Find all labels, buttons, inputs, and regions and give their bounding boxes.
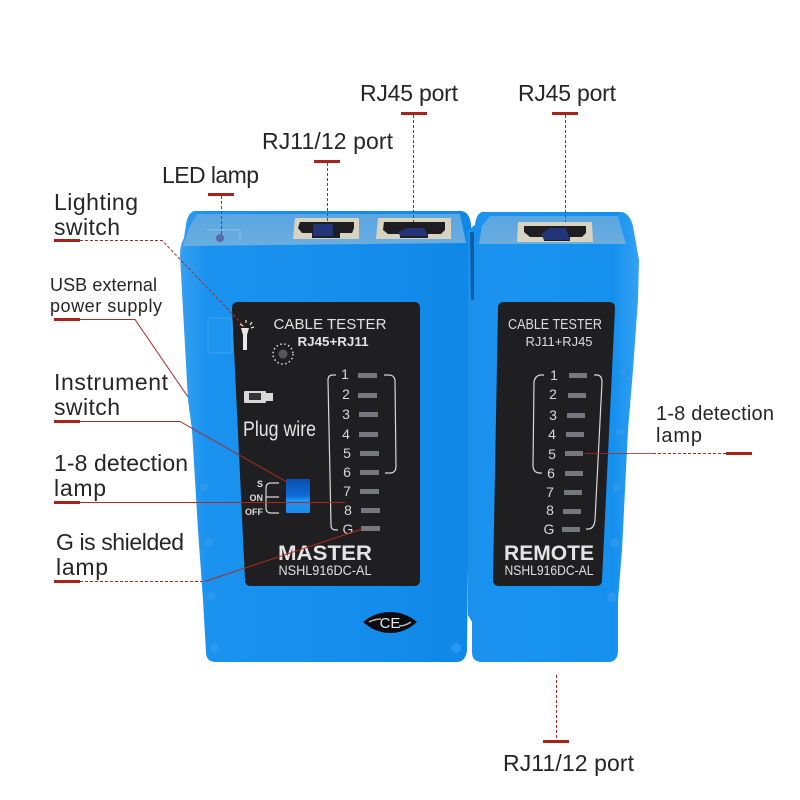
- panel title: CABLE TESTER: [508, 316, 602, 333]
- master model: NSHL916DC-AL: [278, 562, 372, 578]
- remote model: NSHL916DC-AL: [504, 562, 594, 578]
- label: RJ11/12 port bottom: RJ11/12 port: [503, 750, 635, 776]
- master lamp numbers: 2: [342, 386, 350, 402]
- switch labels: S: [257, 479, 263, 489]
- remote lamp numbers: 7: [546, 484, 554, 500]
- master brackets: [328, 375, 396, 530]
- master lamp numbers: 4: [342, 426, 350, 442]
- label: LED lamp: [162, 162, 259, 236]
- label: instrument switch: [54, 369, 287, 482]
- label: lighting switch: switch: [54, 214, 120, 240]
- RJ11 port on master: [293, 218, 359, 239]
- label: RJ45 port remote: [518, 80, 617, 222]
- label: instrument switch: Instrument: [54, 369, 169, 395]
- label: G is shielded lamp: G is shielded: [56, 529, 184, 555]
- icon: indicator lamp: [273, 344, 293, 364]
- remote lamp numbers: 5: [548, 446, 556, 462]
- icon: flashlight: [240, 320, 254, 350]
- panel subtitle: RJ45+RJ11: [298, 334, 368, 349]
- master top face: [183, 214, 466, 246]
- label: RJ45 port master: RJ45 port: [360, 80, 459, 106]
- plug wire text: Plug wire: [243, 418, 316, 441]
- label: RJ45 port master: [360, 80, 459, 222]
- remote lamps: [562, 373, 587, 532]
- CE badge: [363, 612, 417, 633]
- master lamp numbers: 1: [341, 366, 349, 382]
- master name: MASTER: [278, 542, 372, 565]
- master body: [180, 211, 471, 662]
- remote lamp numbers: 6: [547, 465, 555, 481]
- RJ45 port on master: [376, 218, 451, 239]
- remote brackets: [533, 375, 602, 529]
- master panel: [232, 302, 420, 586]
- switch bracket: [266, 483, 279, 513]
- led lamp: [207, 230, 240, 242]
- label: LED lamp: LED lamp: [162, 162, 259, 188]
- label: RJ11/12 port top: RJ11/12 port: [262, 128, 394, 154]
- switch labels: ON: [250, 493, 263, 503]
- switch labels: OFF: [245, 507, 263, 517]
- gap shadow between devices: [470, 232, 474, 300]
- device: remote tester: [468, 212, 639, 662]
- panel title: CABLE TESTER: [274, 316, 387, 333]
- remote name: REMOTE: [504, 542, 594, 565]
- master side bumps: [199, 482, 461, 653]
- remote lamp numbers: 3: [549, 407, 557, 423]
- label: USB external power supply: USB external: [50, 275, 157, 295]
- remote lamp numbers: 1: [550, 367, 558, 383]
- device: master tester: [180, 211, 471, 662]
- master lamp numbers: 3: [342, 406, 350, 422]
- remote body: [468, 212, 639, 662]
- remote lamp numbers: [544, 367, 558, 537]
- label: USB external power supply: power supply: [50, 296, 162, 316]
- label: USB external power supply: [50, 275, 188, 397]
- master lamp numbers: [341, 366, 353, 537]
- label: lighting switch: Lighting: [54, 189, 138, 215]
- label: instrument switch: switch: [54, 394, 120, 420]
- label: 1-8 detection lamp right: 1-8 detection: [656, 403, 774, 425]
- label: 1-8 detection lamp left: 1-8 detection: [54, 450, 188, 476]
- label: 1-8 detection lamp right: [585, 403, 774, 455]
- remote lamp numbers: G: [544, 521, 554, 537]
- switch labels: [245, 479, 263, 517]
- remote lamp numbers: 2: [549, 386, 557, 402]
- label: RJ11/12 port top: [262, 128, 394, 222]
- label: G is shielded lamp: [54, 529, 362, 583]
- panel subtitle: RJ11+RJ45: [526, 334, 592, 349]
- side tab: [208, 318, 232, 353]
- master lamp numbers: 7: [343, 483, 351, 499]
- label: 1-8 detection lamp left: lamp: [54, 475, 106, 501]
- label: G is shielded lamp: lamp: [56, 554, 108, 580]
- master lamps: [358, 373, 380, 531]
- label: RJ11/12 port bottom: [503, 675, 635, 776]
- label: RJ45 port remote: RJ45 port: [518, 80, 617, 106]
- icon: usb plug: [244, 391, 273, 403]
- label: 1-8 detection lamp left: [54, 450, 345, 504]
- RJ45 port on remote: [517, 222, 593, 242]
- remote panel: [493, 302, 615, 586]
- master lamp numbers: 5: [343, 445, 351, 461]
- master lamp numbers: 6: [343, 464, 351, 480]
- remote side bumps: [607, 367, 629, 602]
- label: 1-8 detection lamp right: lamp: [656, 425, 702, 447]
- master lamp numbers: 8: [344, 502, 352, 518]
- CE badge: CE: [380, 615, 400, 632]
- slide switch: [286, 479, 310, 513]
- master lamp numbers: G: [343, 521, 353, 537]
- remote lamp numbers: 8: [546, 502, 554, 518]
- label: lighting switch: [54, 189, 245, 327]
- remote lamp numbers: 4: [548, 426, 556, 442]
- remote top face: [479, 216, 626, 244]
